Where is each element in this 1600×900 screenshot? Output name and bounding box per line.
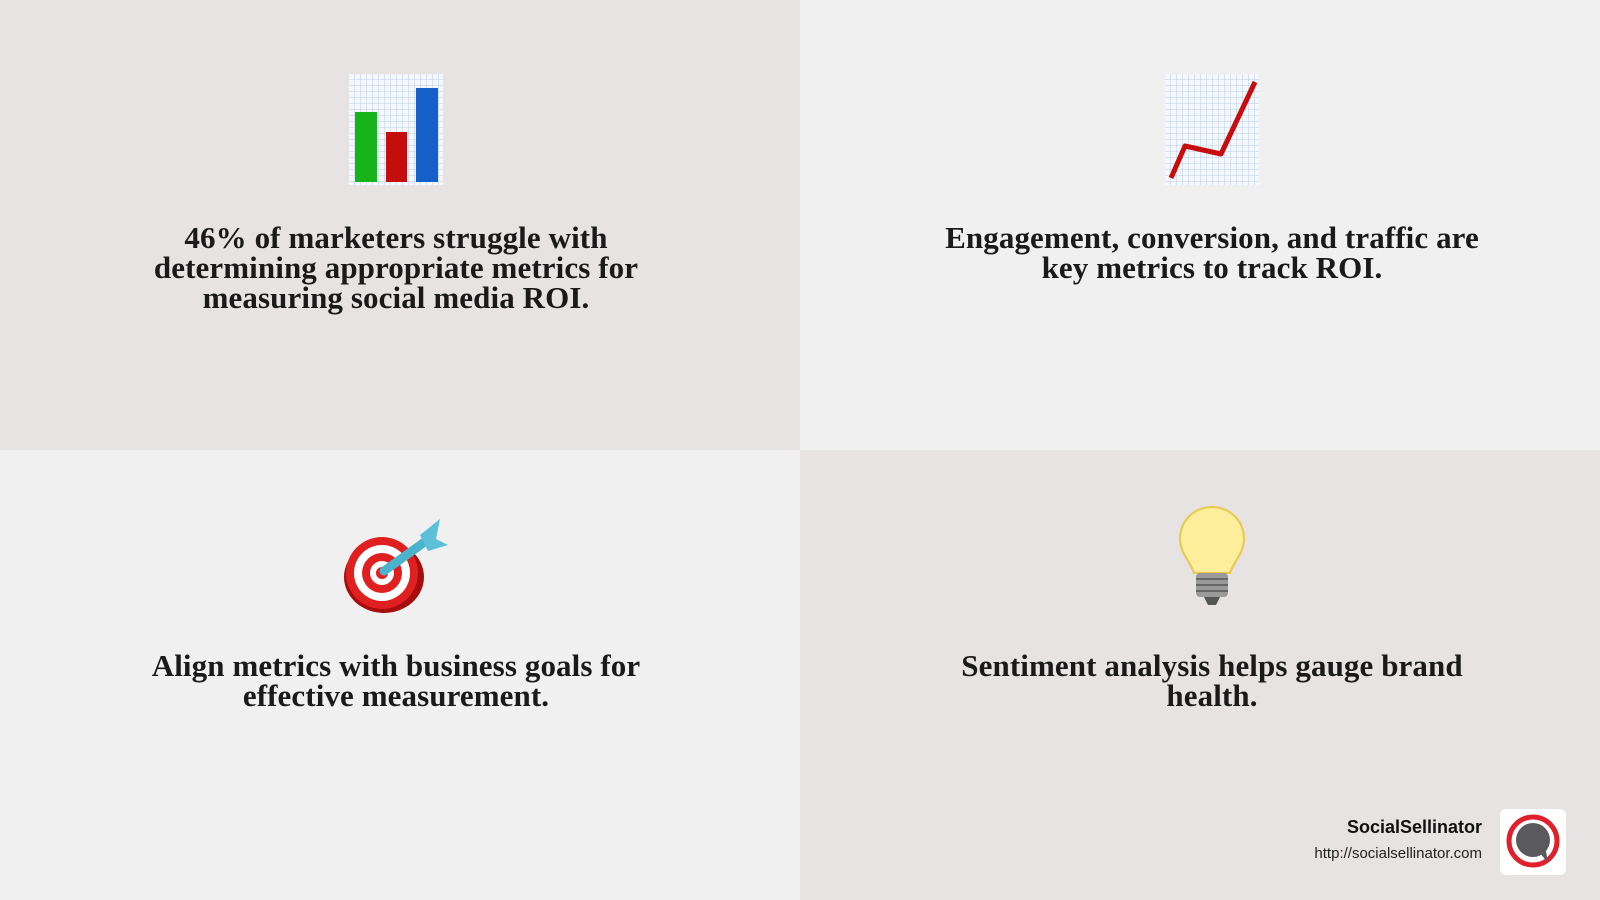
text: align metrics: effective measurement. [243,678,549,713]
icon: logo [1500,809,1566,875]
text: sentiment [961,648,1463,713]
text: stat 46%: determining appropriate metrics for [154,250,638,285]
brand url: http://socialsellinator.com [1314,845,1482,862]
text: sentiment: Sentiment analysis helps gauge brand [961,648,1463,683]
panel: bottom-left [0,450,800,900]
text: stat 46%: 46% of marketers struggle with [184,220,608,255]
text: align metrics: Align metrics with business goals for [152,648,640,683]
panel: bottom-right [800,450,1600,900]
icon: light bulb [1179,506,1245,605]
brand name: SocialSellinator [1347,817,1482,837]
panel: top-right [800,0,1600,450]
text: key metrics [945,220,1479,285]
icon: target with dart [344,519,448,613]
text: align metrics [152,648,640,713]
panel: top-left [0,0,800,450]
icon: line chart [1165,74,1259,185]
brand block [1314,809,1566,875]
icon: bar chart [349,74,443,185]
text: key metrics: Engagement, conversion, and traffic are [945,220,1479,255]
text: stat 46%: measuring social media ROI. [203,280,589,315]
text: stat 46% [154,220,638,315]
text: sentiment: health. [1166,678,1258,713]
text: key metrics: key metrics to track ROI. [1042,250,1382,285]
